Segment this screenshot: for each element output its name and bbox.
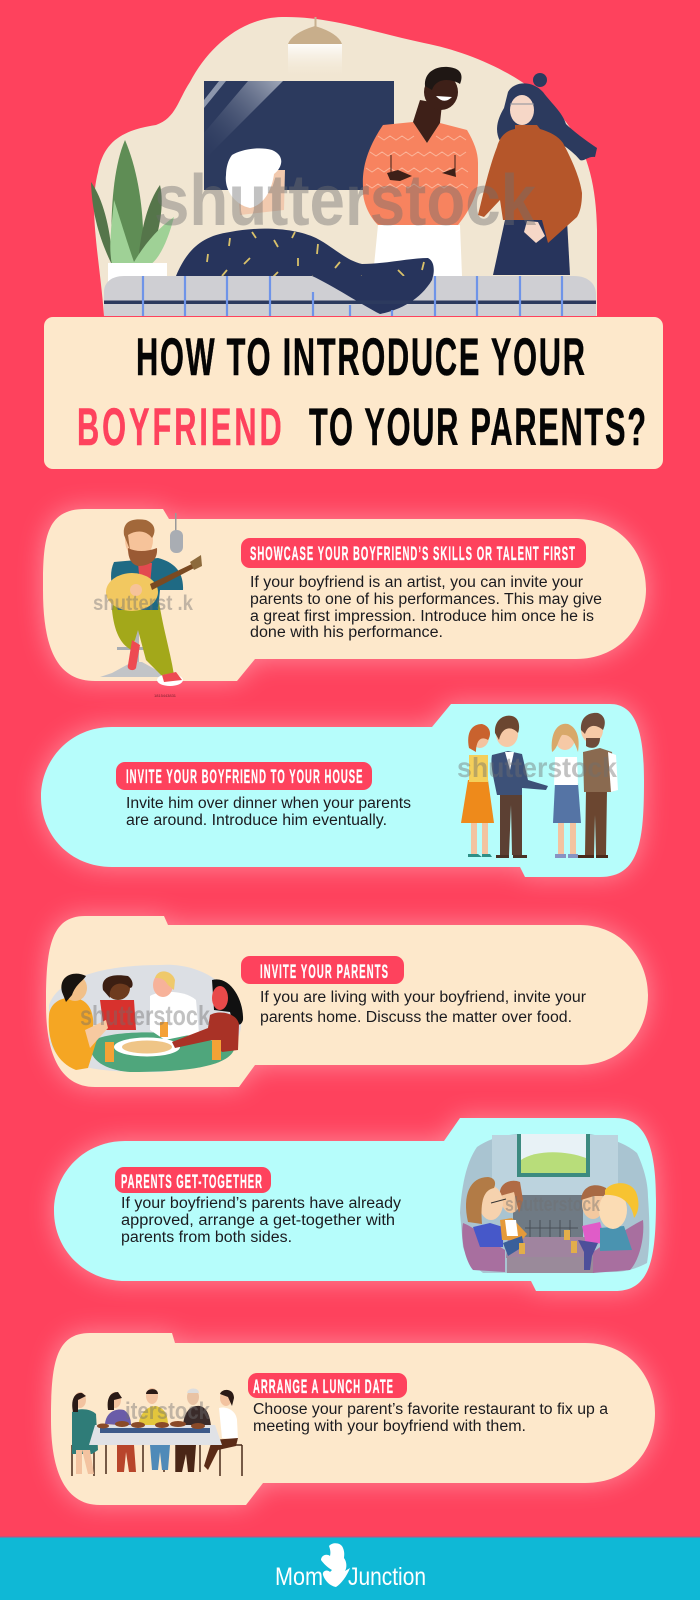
watermark: shutterst .k — [93, 592, 193, 615]
body text: meeting with your boyfriend with them. — [253, 1418, 526, 1435]
heading text: SHOWCASE YOUR BOYFRIEND’S SKILLS OR TALENT FIRST — [250, 544, 576, 565]
logo icon — [321, 1543, 350, 1587]
hero illustration — [91, 17, 597, 316]
icon: guitarist — [100, 513, 202, 686]
watermark: shutterstock — [154, 161, 537, 241]
body text: parents from both sides. — [121, 1229, 292, 1246]
television — [204, 81, 394, 190]
icon: friends at table — [49, 965, 243, 1072]
body text: approved, arrange a get-together with — [121, 1212, 395, 1229]
image id caption: 1815443831 — [154, 693, 177, 698]
seated older person — [176, 148, 434, 314]
sofa — [104, 276, 596, 316]
heading pill — [248, 1373, 407, 1398]
card 4 background — [54, 1118, 656, 1291]
hero backdrop blob — [94, 17, 597, 316]
body text: If your boyfriend is an artist, you can invite your — [250, 574, 583, 591]
woman in brown sweater — [478, 73, 597, 275]
icon: four standing people — [461, 713, 618, 858]
icon: ceiling lamp — [288, 17, 342, 76]
title line 1: HOW TO INTRODUCE YOUR — [136, 329, 585, 387]
heading text: INVITE YOUR BOYFRIEND TO YOUR HOUSE — [126, 767, 363, 788]
panel: parents get-together — [54, 1118, 656, 1291]
body text: Invite him over dinner when your parents — [126, 795, 411, 812]
body text: a great first impression. Introduce him once he is — [250, 608, 594, 625]
plant — [91, 140, 174, 293]
title line 2: TO YOUR PARENTS? — [309, 399, 646, 457]
footer band — [0, 1537, 700, 1600]
body text: parents home. Discuss the matter over food. — [260, 1009, 572, 1026]
heading pill — [116, 762, 372, 790]
panel: lunch date — [51, 1333, 655, 1505]
logo wordmark: Mom — [275, 1563, 323, 1591]
footer — [0, 1536, 700, 1600]
watermark: shutterstock — [80, 1000, 210, 1031]
title highlighted word: BOYFRIEND — [77, 399, 282, 457]
watermark: iterstock — [125, 1398, 211, 1425]
card 5 background — [51, 1333, 655, 1505]
footer top edge — [0, 1536, 700, 1538]
body text: done with his performance. — [250, 624, 443, 641]
panel: invite parents — [46, 916, 648, 1087]
heading pill — [241, 956, 404, 984]
title panel — [44, 317, 663, 469]
body text: If you are living with your boyfriend, invite your — [260, 989, 586, 1006]
panel: showcase skills — [43, 509, 646, 698]
watermark: shutterstock — [457, 752, 617, 783]
heading pill — [241, 538, 586, 568]
body text: Choose your parent’s favorite restaurant to fix up a — [253, 1401, 608, 1418]
title background — [44, 317, 663, 469]
heading text: ARRANGE A LUNCH DATE — [253, 1377, 393, 1398]
card 1 background — [43, 509, 646, 681]
watermark: shutterstock — [505, 1194, 601, 1216]
heading text: INVITE YOUR PARENTS — [260, 962, 388, 983]
heading text: PARENTS GET-TOGETHER — [121, 1172, 262, 1193]
card 2 background — [41, 704, 644, 877]
heading pill — [115, 1167, 271, 1193]
man in orange sweater — [363, 67, 478, 276]
body text: parents to one of his performances. This may give — [250, 591, 602, 608]
card 3 background — [46, 916, 648, 1087]
icon: family dining table — [72, 1388, 242, 1476]
body text: are around. Introduce him eventually. — [126, 812, 387, 829]
logo wordmark second part: Junction — [348, 1563, 426, 1591]
panel: invite boyfriend — [41, 704, 644, 877]
MomJunction logo — [275, 1543, 350, 1591]
body text: If your boyfriend’s parents have already — [121, 1195, 401, 1212]
icon: couples on sofas — [460, 1134, 649, 1273]
